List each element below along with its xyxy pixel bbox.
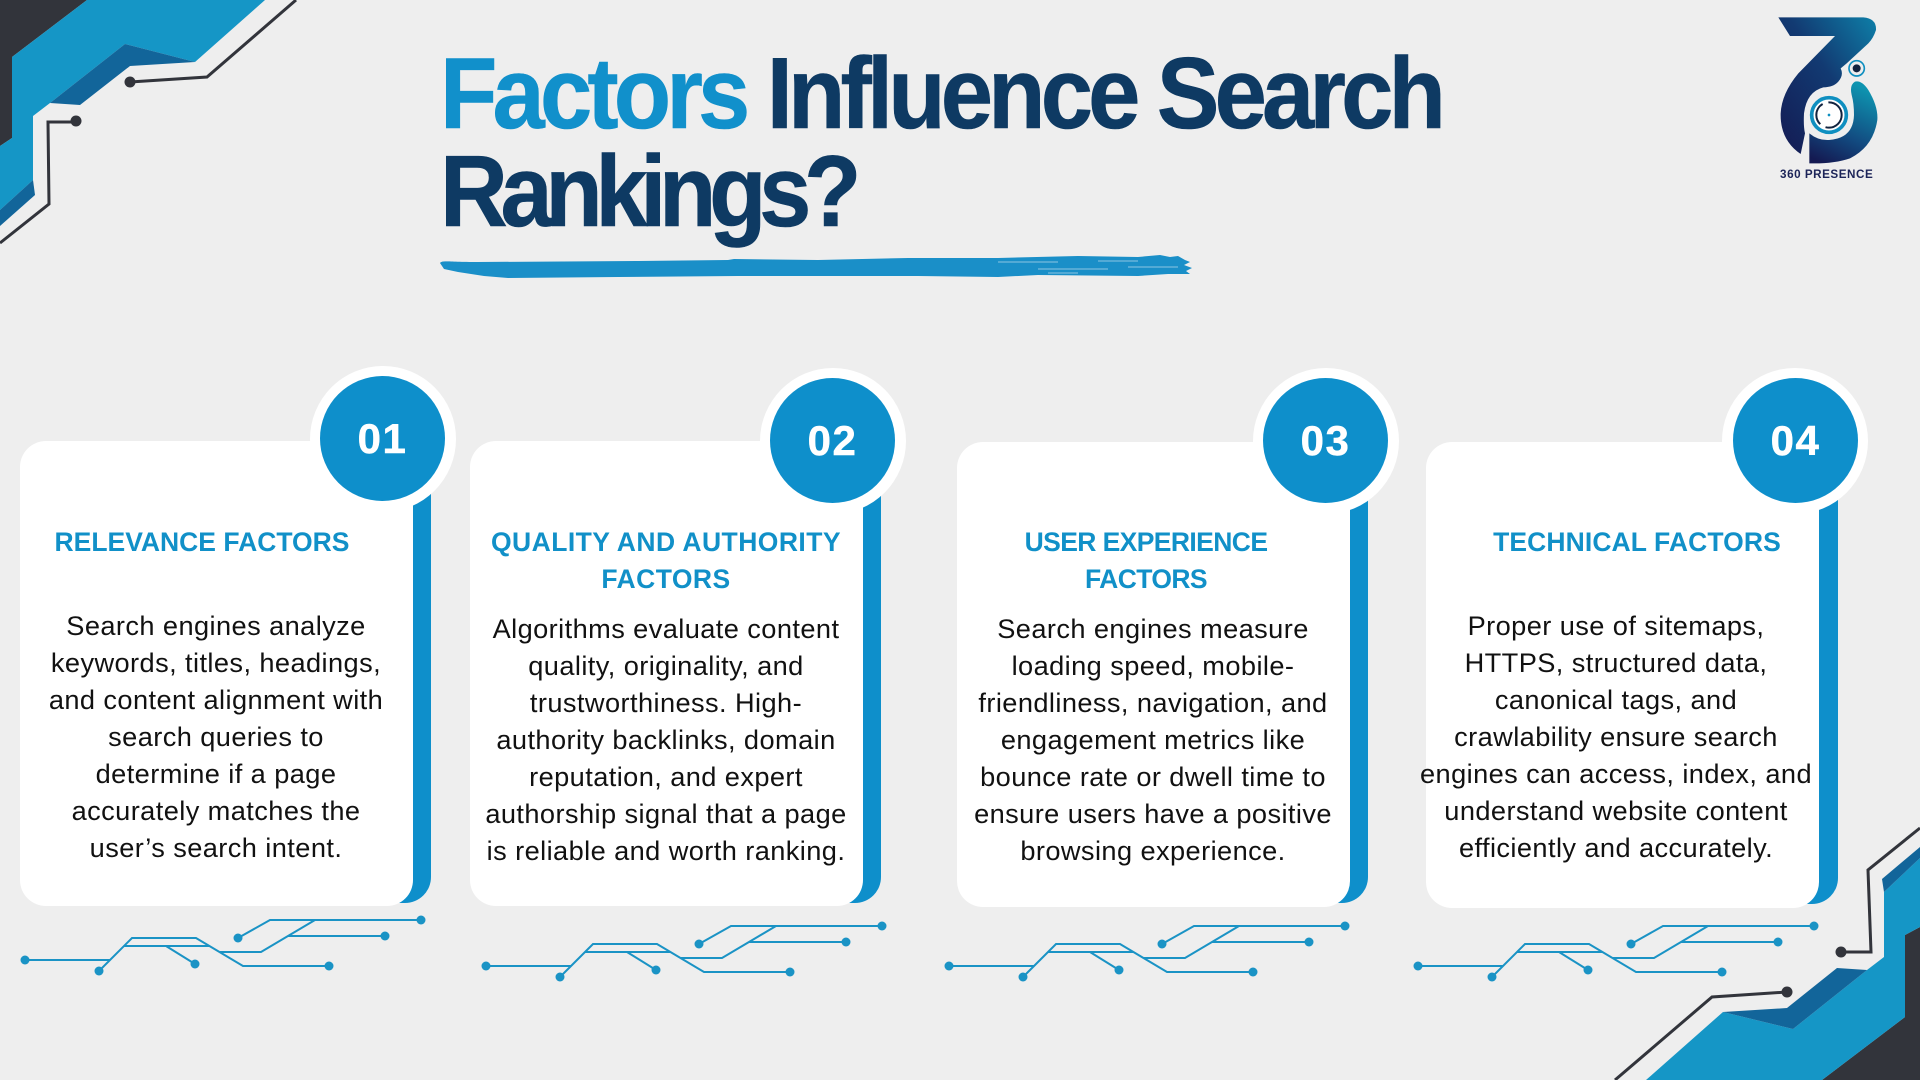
card 4 body text: efficiently and accurately. — [1459, 832, 1773, 863]
card 3 body text: bounce rate or dwell time to — [980, 761, 1326, 792]
card 3 number ring — [1253, 368, 1399, 514]
title — [440, 38, 1441, 248]
card 2 heading — [491, 527, 841, 594]
card 2 number ring — [760, 368, 906, 514]
card 3 accent bar — [1308, 490, 1368, 903]
card 2 body text: is reliable and worth ranking. — [487, 835, 845, 866]
card 1 body text: search queries to — [108, 721, 324, 752]
card 3 body text — [974, 613, 1332, 866]
card 3 body text: ensure users have a positive — [974, 798, 1332, 829]
card 4 number — [1733, 378, 1858, 503]
card 2 heading: QUALITY AND AUTHORITY — [491, 527, 841, 557]
card 3 body text: loading speed, mobile- — [1012, 650, 1294, 681]
panel: card 3 user experience factors — [944, 368, 1399, 982]
card 2 number — [770, 378, 895, 503]
panel: card 2 quality and authority factors — [470, 368, 906, 982]
card 3 number: 03 — [1301, 417, 1350, 464]
card 1 number — [320, 376, 445, 501]
card 4 heading: TECHNICAL FACTORS — [1493, 527, 1781, 557]
card 2 body text: authority backlinks, domain — [496, 724, 836, 755]
card 2 body text: Algorithms evaluate content — [493, 613, 839, 644]
card 1 body text: and content alignment with — [49, 684, 383, 715]
card 2 body text: authorship signal that a page — [485, 798, 847, 829]
card 3 circuit decoration — [944, 922, 1350, 982]
card 3 body text: browsing experience. — [1020, 835, 1286, 866]
card 1 body text: determine if a page — [96, 758, 336, 789]
card 1 background — [20, 441, 413, 906]
card 4 number: 04 — [1771, 417, 1820, 464]
card 3 number — [1263, 378, 1388, 503]
card 2 circuit decoration — [482, 922, 886, 982]
card 2 body text: quality, originality, and — [528, 650, 804, 681]
card 4 body text: Proper use of sitemaps, — [1468, 610, 1764, 641]
card 4 body text: understand website content — [1444, 795, 1788, 826]
card 2 accent bar — [821, 490, 881, 903]
card 2 heading: FACTORS — [601, 564, 731, 594]
card 3 background — [957, 442, 1350, 907]
card 2 body text — [485, 613, 847, 866]
card 1 body text — [49, 610, 383, 863]
card 1 body text: keywords, titles, headings, — [51, 647, 381, 678]
panel: card 4 technical factors — [1414, 368, 1868, 982]
card 3 heading — [1025, 527, 1268, 594]
card 1 body text: Search engines analyze — [66, 610, 366, 641]
card 2 background — [470, 441, 863, 906]
panel: card 1 relevance factors — [20, 366, 456, 976]
card 1 circuit decoration — [20, 916, 426, 976]
card 4 body text: crawlability ensure search — [1454, 721, 1778, 752]
card 2 number: 02 — [808, 417, 857, 464]
card 1 body text: accurately matches the — [72, 795, 360, 826]
card 3 heading: USER EXPERIENCE — [1025, 527, 1267, 557]
card 4 body text — [1420, 610, 1812, 863]
logo: 360 PRESENCE — [1780, 168, 1873, 181]
card 2 body text: reputation, and expert — [529, 761, 803, 792]
card 4 circuit decoration — [1414, 922, 1818, 982]
card 3 heading: FACTORS — [1085, 564, 1207, 594]
card 4 body text: canonical tags, and — [1495, 684, 1737, 715]
card 4 background — [1426, 442, 1819, 908]
card 1 number ring — [310, 366, 456, 512]
card 1 heading: RELEVANCE FACTORS — [55, 527, 349, 557]
card 1 accent bar — [371, 490, 431, 903]
card 3 body text: friendliness, navigation, and — [978, 687, 1328, 718]
title: Rankings? — [440, 136, 854, 248]
card 4 accent bar — [1778, 490, 1838, 904]
card 4 number ring — [1722, 368, 1868, 514]
card 3 body text: engagement metrics like — [1001, 724, 1305, 755]
card 4 body text: HTTPS, structured data, — [1465, 647, 1767, 678]
card 3 body text: Search engines measure — [997, 613, 1309, 644]
card 2 body text: trustworthiness. High- — [530, 687, 802, 718]
logo — [1778, 17, 1878, 181]
card 1 number: 01 — [358, 415, 407, 462]
card 1 body text: user’s search intent. — [90, 832, 342, 863]
title: Factors Influence Search — [440, 38, 1441, 150]
title brush underline — [440, 255, 1192, 278]
card 4 body text: engines can access, index, and — [1420, 758, 1812, 789]
decoration: top-left corner — [0, 0, 297, 244]
